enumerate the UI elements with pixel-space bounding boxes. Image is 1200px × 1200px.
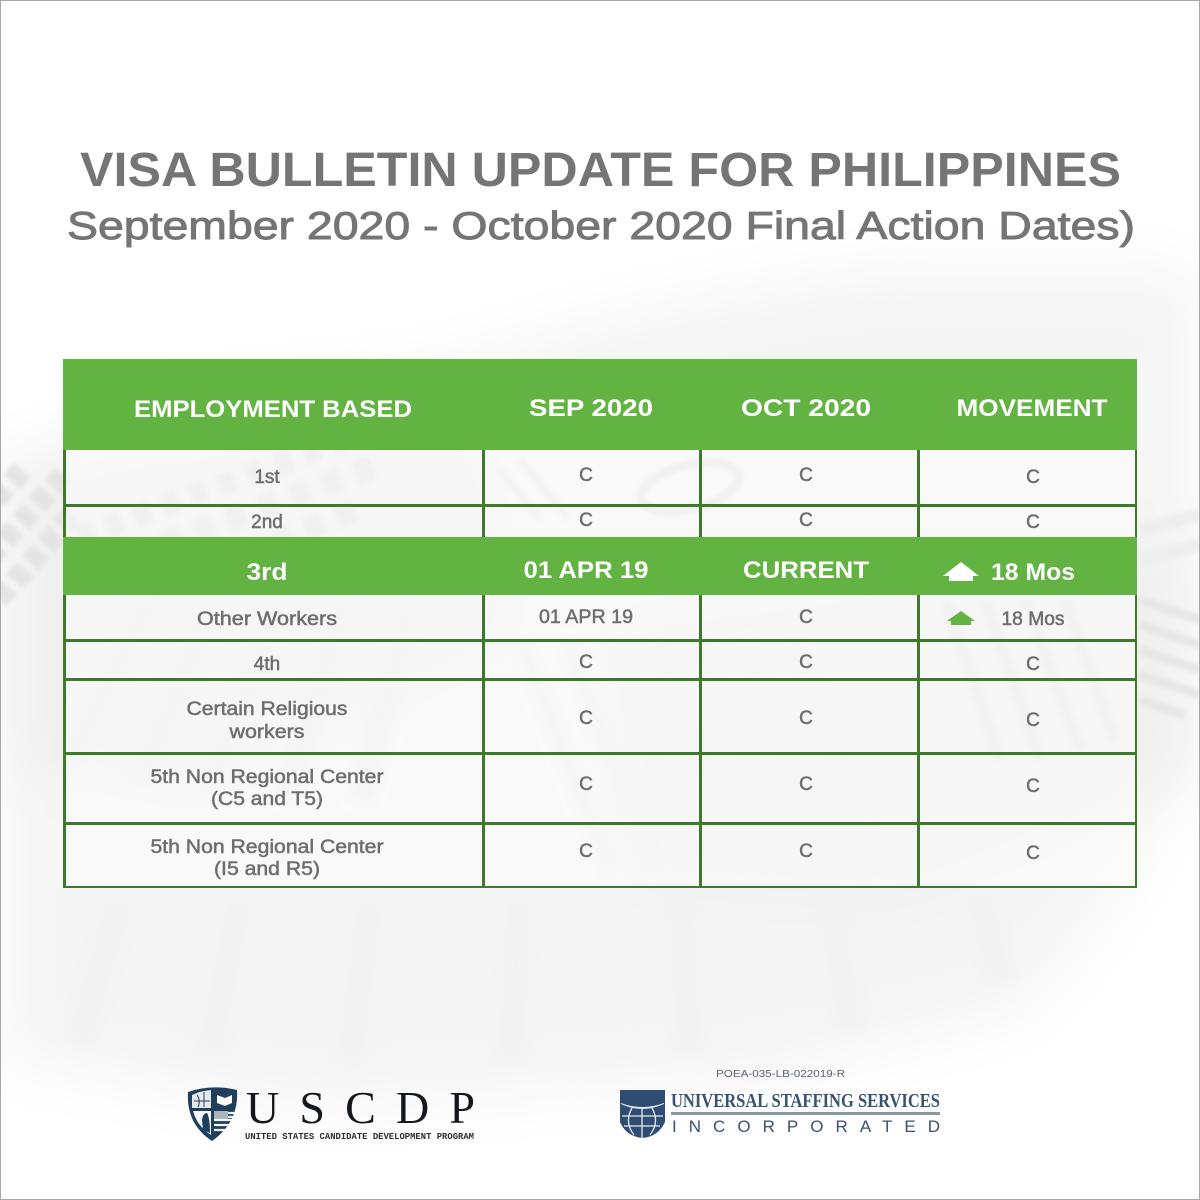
row: 5th Non Regional Center C5 and T5: (C5 and T5) bbox=[211, 789, 323, 810]
header row: MOVEMENT bbox=[956, 395, 1108, 422]
row: 2nd: C bbox=[579, 510, 593, 531]
row: 4th: C bbox=[799, 652, 813, 673]
row: 5th Non Regional Center I5 and R5: 5th Non Regional Center bbox=[150, 837, 384, 858]
row: Certain Religious workers: C bbox=[799, 708, 813, 729]
row: 5th Non Regional Center C5 and T5: C bbox=[1026, 776, 1040, 797]
title: VISA BULLETIN UPDATE FOR PHILIPPINES bbox=[80, 144, 1121, 197]
row: 5th Non Regional Center I5 and R5: C bbox=[1026, 843, 1040, 864]
row: 3rd highlighted: 18 Mos bbox=[991, 559, 1075, 586]
row: 4th bbox=[254, 652, 1040, 675]
USCDP wordmark: USCDP bbox=[246, 1082, 475, 1133]
row: 2nd: 2nd bbox=[251, 512, 283, 533]
row: 5th Non Regional Center I5 and R5 bbox=[150, 837, 1040, 880]
icon: USCDP shield bbox=[188, 1087, 237, 1141]
row: 1st bbox=[254, 465, 1040, 488]
subtitle: September 2020 - October 2020 Final Action Dates) bbox=[67, 205, 1135, 248]
header row: EMPLOYMENT BASED bbox=[134, 396, 412, 423]
divider rule bbox=[671, 1112, 940, 1115]
background: blurred banknote bbox=[0, 270, 1200, 1110]
table bbox=[63, 359, 1137, 888]
company name: UNIVERSAL STAFFING SERVICES bbox=[671, 1090, 940, 1112]
table grid lines bbox=[63, 450, 1137, 888]
row: 5th Non Regional Center C5 and T5 bbox=[150, 767, 1040, 810]
row: 4th: C bbox=[579, 652, 593, 673]
row: Other Workers bbox=[197, 607, 1064, 630]
row: Certain Religious workers: Certain Religious bbox=[186, 699, 348, 720]
row: Certain Religious workers: workers bbox=[228, 722, 304, 743]
icon: white up arrow bbox=[943, 562, 979, 581]
icon: globe bbox=[620, 1090, 665, 1138]
row: Other Workers: C bbox=[799, 607, 813, 628]
row: 4th: 4th bbox=[254, 654, 280, 675]
row: Other Workers: 01 APR 19 bbox=[539, 607, 633, 628]
row: 1st: 1st bbox=[254, 467, 280, 488]
row: 3rd highlighted: CURRENT bbox=[743, 557, 869, 584]
license number: POEA-035-LB-022019-R bbox=[716, 1069, 845, 1080]
ghost banknote lettering, rows rising to the right bbox=[0, 445, 97, 606]
row: Certain Religious workers: C bbox=[1026, 710, 1040, 731]
row: 2nd bbox=[251, 510, 1040, 533]
row: 3rd highlighted bbox=[63, 537, 1137, 595]
header row: OCT 2020 bbox=[741, 395, 871, 422]
logo: USCDP bbox=[188, 1082, 475, 1142]
logo: Universal Staffing Services bbox=[620, 1069, 940, 1138]
row: Certain Religious workers: C bbox=[579, 708, 593, 729]
header row: SEP 2020 bbox=[529, 395, 653, 422]
row: 5th Non Regional Center C5 and T5: C bbox=[579, 774, 593, 795]
row: 1st: C bbox=[1026, 467, 1040, 488]
row: 5th Non Regional Center I5 and R5: C bbox=[579, 841, 593, 862]
company suffix: INCORPORATED bbox=[672, 1117, 940, 1136]
table body: cell fill bbox=[64, 450, 1136, 887]
row: 1st: C bbox=[799, 465, 813, 486]
row: 2nd: C bbox=[1026, 512, 1040, 533]
row: 5th Non Regional Center I5 and R5: C bbox=[799, 841, 813, 862]
row: 3rd highlighted: 3rd bbox=[246, 559, 288, 586]
row: Other Workers: Other Workers bbox=[197, 609, 337, 630]
row: Certain Religious workers bbox=[186, 699, 1040, 743]
row: Other Workers: 18 Mos bbox=[1002, 609, 1064, 630]
row: 3rd highlighted: 01 APR 19 bbox=[524, 557, 648, 584]
row: 5th Non Regional Center C5 and T5: C bbox=[799, 774, 813, 795]
icon: green up arrow bbox=[947, 611, 975, 625]
row: 5th Non Regional Center I5 and R5: (I5 and R5) bbox=[214, 859, 320, 880]
row: 1st: C bbox=[579, 465, 593, 486]
row: 5th Non Regional Center C5 and T5: 5th Non Regional Center bbox=[150, 767, 384, 788]
row: 2nd: C bbox=[799, 510, 813, 531]
header row bbox=[63, 359, 1137, 450]
row: 4th: C bbox=[1026, 654, 1040, 675]
USCDP tagline: UNITED STATES CANDIDATE DEVELOPMENT PROGRAM bbox=[245, 1131, 474, 1142]
